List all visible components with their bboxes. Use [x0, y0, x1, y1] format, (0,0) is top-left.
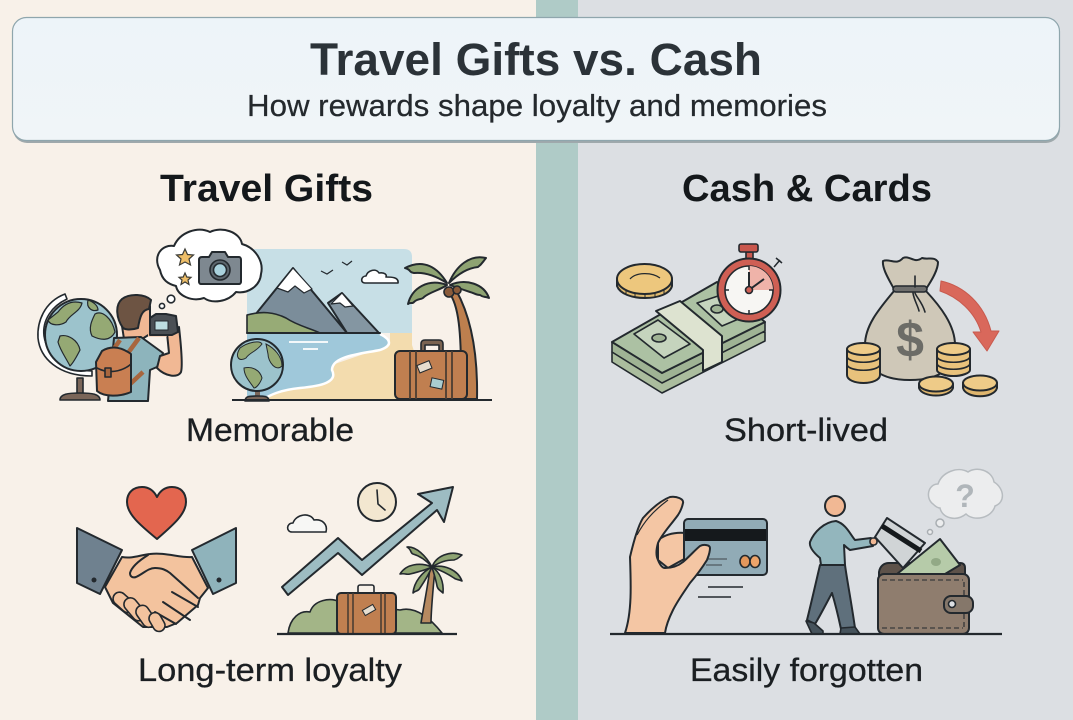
icon: question cloud [928, 469, 1002, 534]
label: memorable: Memorable [186, 412, 354, 448]
arrow: falling value [940, 281, 999, 351]
illustration: beach landscape [231, 249, 492, 401]
icon: credit card [684, 519, 767, 575]
illustration: person putting card in wallet [610, 469, 1002, 634]
icon: stopwatch [718, 244, 782, 322]
icon: mountains [255, 268, 379, 333]
ground line [610, 633, 1002, 635]
icon: money stack [612, 282, 765, 393]
green hill [247, 313, 320, 333]
dollar sign: $ [896, 312, 924, 368]
icon: heart [127, 487, 186, 539]
heading: travel gifts: Travel Gifts [160, 168, 373, 210]
header banner [12, 18, 1060, 143]
icon: palm tree [400, 547, 462, 623]
icon: suitcase [337, 585, 396, 634]
illustration: cash stack and stopwatch [612, 244, 782, 393]
icon: clock [358, 483, 396, 521]
icon: person [806, 496, 877, 634]
subtitle: How rewards shape loyalty and memories [247, 88, 827, 123]
cloud [362, 270, 398, 283]
icon: person photographing [96, 295, 182, 401]
icon: small globe [231, 339, 283, 401]
label: long-term loyalty: Long-term loyalty [138, 652, 402, 688]
illustration: traveler with globe and camera [38, 230, 262, 401]
sand [262, 333, 430, 400]
left cuff [77, 528, 122, 594]
icon: fingers behind card [658, 533, 686, 568]
illustration: rising loyalty arrow [277, 483, 462, 634]
fingers [110, 590, 167, 634]
panel: travel gifts background [0, 0, 536, 720]
icon: question cloud: ? [955, 478, 975, 514]
ground line [232, 399, 492, 401]
icon: large globe [38, 294, 117, 400]
icon: wallet [875, 518, 973, 634]
label: easily forgotten: Easily forgotten [690, 652, 923, 688]
icon: coin [617, 264, 672, 298]
ground line [277, 633, 457, 635]
motion lines [698, 587, 743, 597]
icon: bushes [288, 600, 442, 633]
illustration: hand with payment card [625, 497, 767, 633]
icon: money bag [865, 257, 955, 380]
illustration: handshake and heart [77, 487, 236, 634]
water [247, 333, 389, 400]
heading: cash and cards: Cash & Cards [682, 168, 932, 210]
icon: palm tree [405, 257, 489, 399]
horizon [247, 332, 380, 334]
center divider stripe [536, 0, 578, 720]
icon: thought bubble [157, 230, 262, 309]
icon: suitcase [395, 340, 467, 399]
illustration: money bag with falling arrow [847, 257, 999, 396]
arrow: upward trend [282, 487, 453, 595]
sky [247, 249, 412, 333]
birds [321, 261, 352, 274]
icon: cloud [288, 515, 326, 532]
icon: handshake [77, 528, 236, 634]
label: short-lived: Short-lived [724, 412, 888, 448]
icon: hand [625, 497, 710, 633]
title: Travel Gifts vs. Cash [310, 34, 762, 85]
right cuff [192, 528, 236, 594]
icon: coin stacks [847, 343, 997, 396]
panel: cash and cards background [578, 0, 1073, 720]
